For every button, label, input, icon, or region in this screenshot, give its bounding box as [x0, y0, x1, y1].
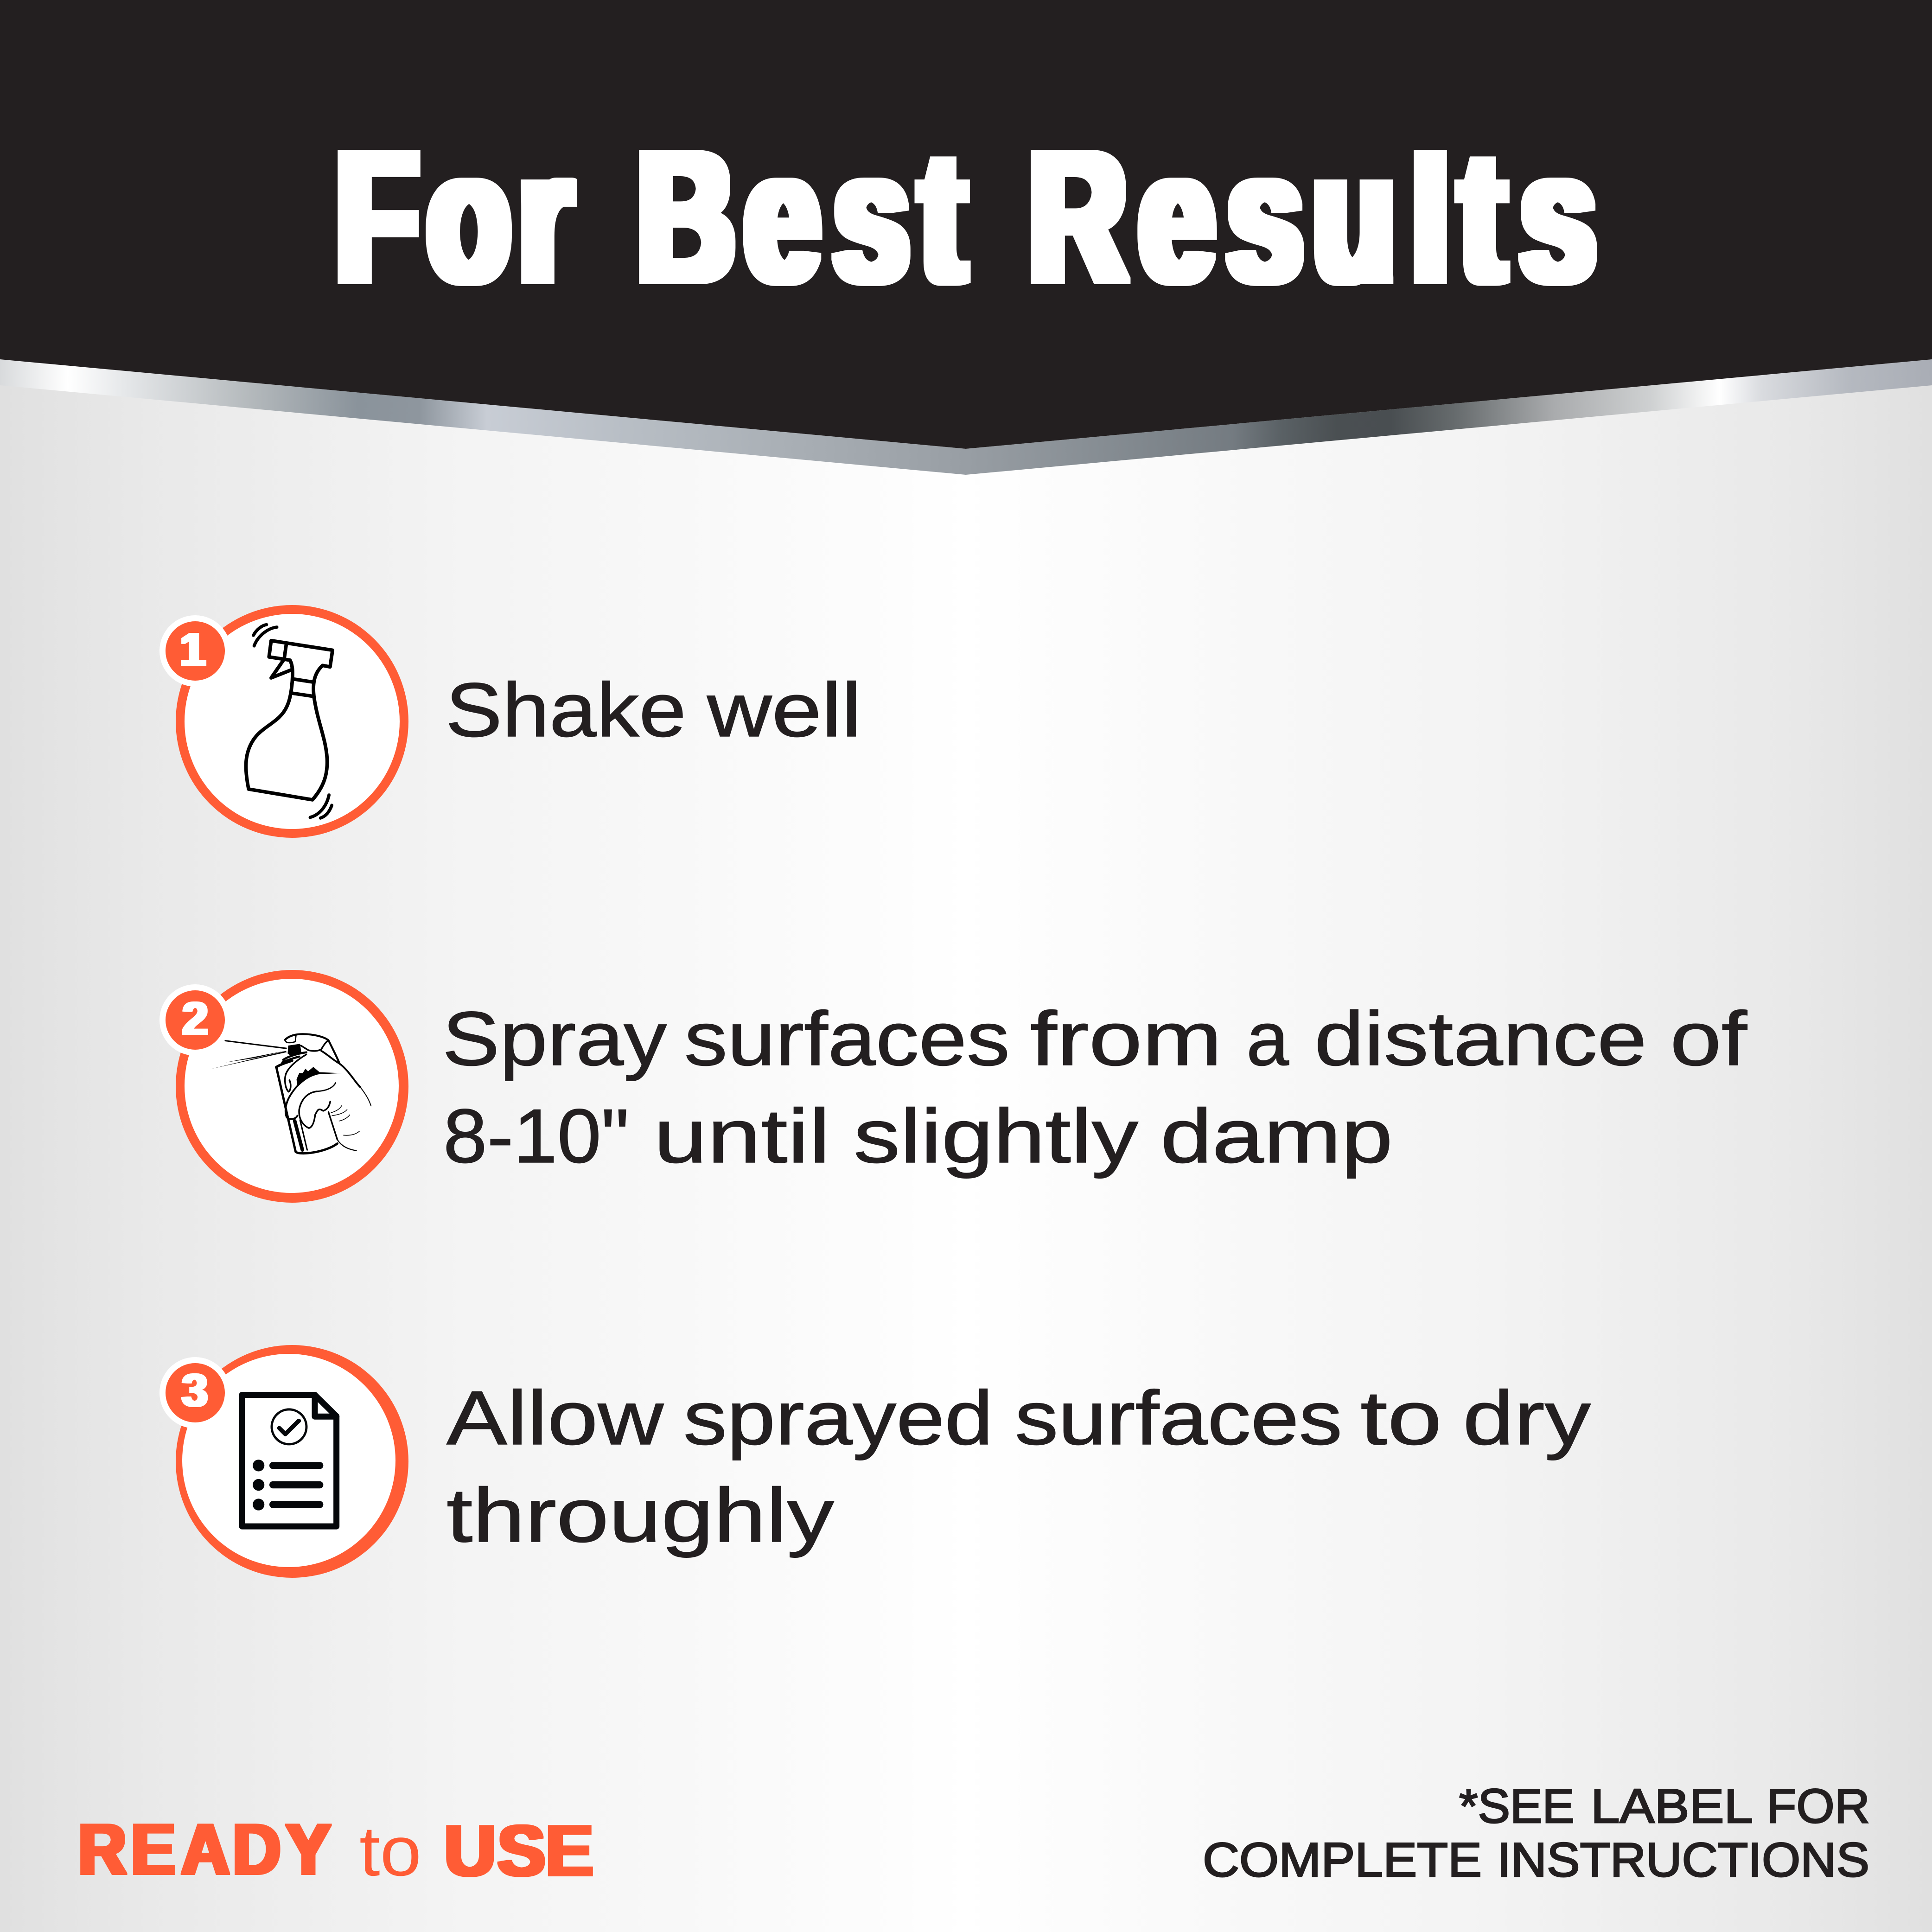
- ready to use tagline: READY: [78, 1809, 331, 1889]
- footnote: see label: INSTRUCTIONS: [1497, 1833, 1869, 1887]
- step 1: [159, 605, 861, 838]
- footnote: see label: COMPLETE: [1203, 1833, 1482, 1887]
- step 1 text: Shake: [446, 667, 686, 752]
- number badge 1: 1: [180, 624, 206, 676]
- step 2 text: damp: [1160, 1093, 1393, 1179]
- step 2 text: slightly: [854, 1093, 1139, 1179]
- icon: shaking spray bottle in ring: [176, 605, 408, 838]
- step 3 text: sprayed: [683, 1375, 993, 1460]
- step 2: [159, 970, 1747, 1203]
- step 3 text: surfaces: [1015, 1375, 1342, 1460]
- header banner: [0, 0, 1932, 475]
- icon: checklist document in ring: [176, 1345, 408, 1578]
- ready to use tagline: to: [359, 1812, 421, 1891]
- dark header panel: [0, 0, 1932, 449]
- step 2 text: until: [654, 1093, 830, 1179]
- step 2 text: a: [1246, 996, 1289, 1081]
- number badge 3: [159, 1357, 231, 1428]
- step 3 text: dry: [1463, 1375, 1591, 1460]
- silver chevron band: [0, 359, 1932, 475]
- step 2 text: of: [1670, 996, 1747, 1081]
- footnote: see label: *SEE: [1459, 1779, 1575, 1833]
- icon: hand spraying aerosol can in ring: [176, 970, 408, 1203]
- footnote: see label: FOR: [1766, 1779, 1870, 1833]
- step 1 text: [446, 667, 861, 752]
- number badge 3: 3: [182, 1365, 208, 1416]
- number badge 1: [159, 615, 231, 687]
- footnote: see label: [1203, 1779, 1870, 1887]
- ready to use tagline: [78, 1809, 593, 1891]
- step 2 text: [442, 996, 1747, 1179]
- ready to use tagline: USE: [444, 1811, 593, 1891]
- step 3 text: to: [1360, 1375, 1442, 1460]
- number badge 2: [159, 984, 231, 1056]
- step 2 text: surfaces: [684, 996, 1010, 1081]
- step 2 text: from: [1030, 996, 1222, 1081]
- step 3 text: [446, 1375, 1591, 1558]
- step 2 text: Spray: [442, 996, 667, 1081]
- footnote: see label: LABEL: [1591, 1779, 1753, 1833]
- step 1 text: well: [707, 667, 861, 752]
- step 3 text: throughly: [446, 1473, 835, 1558]
- step 2 text: 8-10": [443, 1093, 629, 1179]
- step 3 text: Allow: [446, 1375, 664, 1460]
- number badge 2: 2: [182, 993, 208, 1045]
- title: For Best Results: [336, 113, 1595, 321]
- step 3: [159, 1345, 1591, 1578]
- step 2 text: distance: [1314, 996, 1647, 1081]
